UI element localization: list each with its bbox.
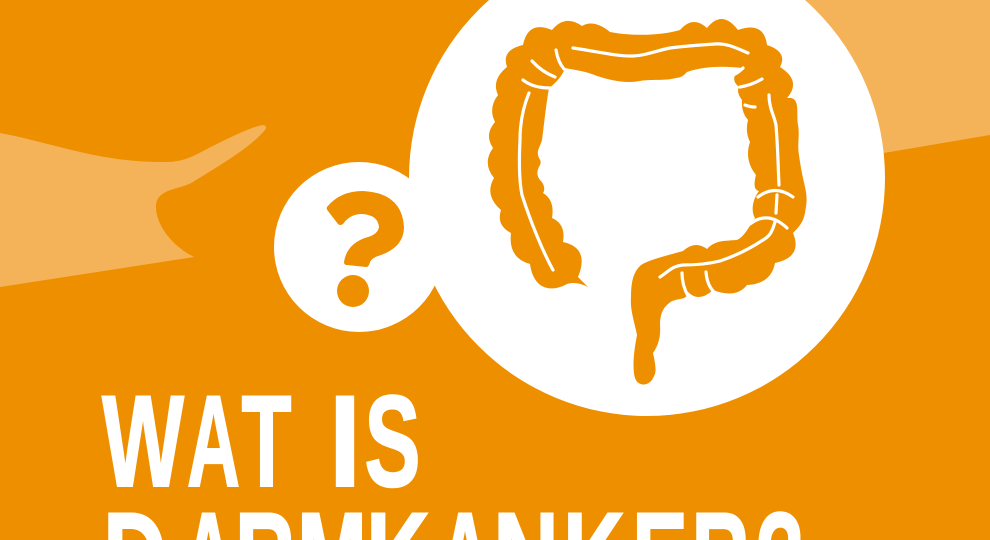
large white circle [409,0,885,416]
title: W [102,368,184,514]
title: A [187,368,240,514]
icon: colon [488,19,807,385]
light shape: top right band [795,0,990,157]
light shape: left speech tail [0,125,266,287]
title: T [242,368,292,514]
title: I [329,368,361,514]
title [101,394,800,540]
small white circle [274,162,444,332]
icon: question mark [327,191,404,307]
title: S [364,368,420,514]
